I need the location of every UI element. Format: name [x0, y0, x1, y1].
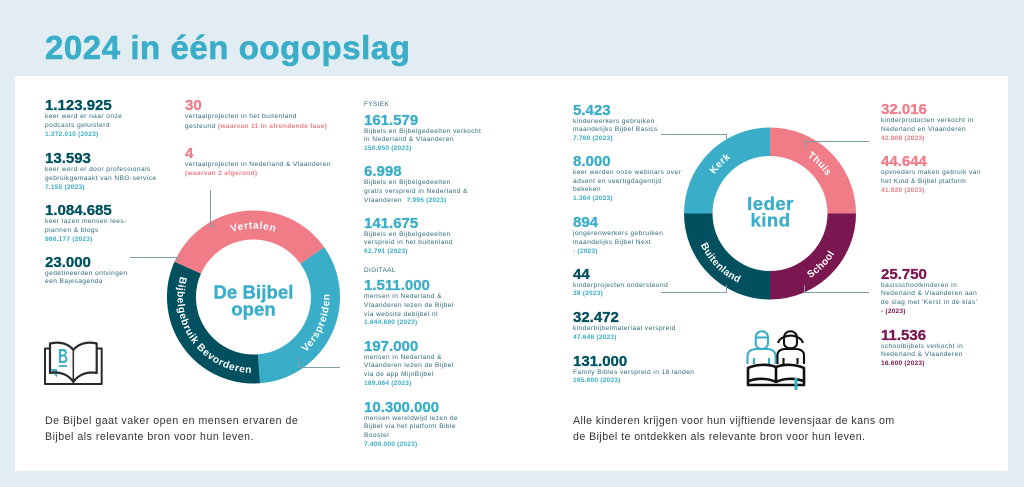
chart: Ieder kind donut: School: [807, 250, 834, 278]
text block: right mission statement: [573, 415, 895, 443]
stat column: School: 25.750: [881, 266, 927, 282]
heading: Fysiek: FYSIEK: [364, 101, 389, 108]
text block: left mission statement: De Bijbel gaat vaker open en mensen ervaren de: [45, 415, 298, 427]
chart: De Bijbel open donut: open: [231, 298, 276, 320]
stat column: Verspreiden digitaal: Vlaanderen lezen de Bijbel: [364, 362, 454, 369]
stat column: Bijbelgebruik: 960.177 (2023): [45, 236, 93, 243]
stat column: School: de slag met 'Kerst in de klas': [881, 299, 977, 306]
stat column: Buitenland: [573, 266, 694, 384]
stat column: Verspreiden digitaal: 7.400.000 (2023): [364, 441, 417, 448]
stat column: Verspreiden digitaal: via de app MijnBijbel: [364, 371, 434, 378]
stat column: Verspreiden digitaal: Booster: [364, 432, 390, 439]
stat column: Thuis: [881, 101, 981, 194]
chart: Ieder kind donut: kind: [750, 210, 791, 230]
stat column: School: 16.600 (2023): [881, 360, 925, 367]
stat column: Verspreiden digitaal: mensen in Nederland &: [364, 293, 442, 300]
heading: Digitaal: DIGITAAL: [364, 267, 396, 274]
stat column: Buitenland: 44: [573, 266, 590, 282]
chart: Ieder kind donut: Thuis: [809, 151, 830, 176]
stat column: School: Nederland & Vlaanderen aan: [881, 290, 977, 297]
stat column: Verspreiden digitaal: 1.644.690 (2023): [364, 319, 417, 326]
stat column: Vertalen: vertaalprojecten in het buitenland: [185, 113, 297, 120]
stat column: Vertalen: (waarvan 2 afgerond): [185, 170, 257, 177]
stat column: Buitenland: 47.646 (2023): [573, 334, 617, 341]
stat column: Bijbelgebruik: 1.123.925: [45, 97, 112, 114]
stat column: Verspreiden digitaal: 197.000: [364, 338, 418, 354]
stat column: Thuis: opvoeders maken gebruik van: [881, 169, 981, 176]
stat column: Verspreiden digitaal: 1.511.000: [364, 277, 430, 294]
stat column: Verspreiden fysiek: in Nederland & Vlaanderen: [364, 136, 454, 143]
stat column: Bijbelgebruik: plannen & blogs: [45, 227, 99, 234]
stat column: Bijbelgebruik: [45, 97, 156, 285]
stat column: School: Nederland & Vlaanderen: [881, 351, 963, 358]
stat column: Kerk: advent en veertigdagentijd: [573, 178, 662, 185]
stat column: Verspreiden digitaal: mensen wereldwijd lezen de: [364, 414, 458, 422]
stat column: Thuis: 44.644: [881, 153, 927, 170]
stat column: Verspreiden fysiek: 6.998: [364, 163, 402, 180]
stat column: Verspreiden fysiek: Bijbels en Bijbelgedeelten: [364, 179, 451, 186]
stat column: Buitenland: 32.472: [573, 309, 619, 326]
stat column: Verspreiden fysiek: 141.675: [364, 214, 418, 232]
stat column: Kerk: jongerenwerkers gebruiken: [573, 230, 663, 237]
stat column: Verspreiden fysiek: gratis verspreid in Nederland &: [364, 188, 468, 195]
stat column: Thuis: Nederland en Vlaanderen: [881, 126, 966, 133]
text block: right mission statement: de Bijbel te ontdekken als relevante bron voor hun leven.: [573, 431, 865, 443]
stat column: Verspreiden fysiek: [364, 112, 481, 255]
stat column: Verspreiden digitaal: via website debijbel.nl: [364, 311, 438, 318]
stat column: Bijbelgebruik: 23.000: [45, 254, 91, 270]
stat column: Vertalen: [185, 97, 331, 177]
stat column: Verspreiden digitaal: Bijbel via het platform Bible: [364, 423, 456, 430]
stat column: Verspreiden fysiek: Bijbels en Bijbelgedeelten verkocht: [364, 128, 481, 134]
stat column: School: [881, 266, 977, 367]
stat column: Verspreiden digitaal: 10.300.000: [364, 398, 439, 416]
stat column: Verspreiden digitaal: [364, 277, 458, 448]
chart: De Bijbel open donut: De Bijbel: [213, 282, 294, 302]
stat column: Bijbelgebruik: gedetineerden ontvingen: [45, 270, 127, 276]
stat column: Thuis: 42.808 (2023): [881, 135, 925, 142]
stat column: Buitenland: 165.000 (2023): [573, 377, 621, 384]
stat column: Bijbelgebruik: keer lazen mensen lees-: [45, 218, 127, 225]
stat column: Buitenland: kinderprojecten ondersteund: [573, 282, 668, 288]
stat column: Kerk: 5.423: [573, 102, 611, 118]
text block: left mission statement: [45, 415, 298, 443]
stat column: Kerk: 1.364 (2023): [573, 195, 613, 202]
stat column: Buitenland: 131.000: [573, 352, 627, 370]
stat column: Bijbelgebruik: 1.372.010 (2023): [45, 131, 98, 138]
stat column: Bijbelgebruik: keer werd er door professionals: [45, 166, 151, 173]
stat column: Buitenland: kinderbijbelmateriaal verspreid: [573, 325, 676, 332]
stat column: Verspreiden fysiek: verspreid in het buitenland: [364, 239, 453, 246]
stat column: Thuis: kinderproducten verkocht in: [881, 117, 974, 124]
stat column: Verspreiden fysiek: Vlaanderen 7.995 (2023): [364, 197, 446, 204]
stat column: Verspreiden digitaal: mensen in Nederland &: [364, 354, 442, 360]
stat column: Verspreiden fysiek: Bijbels en Bijbelgedeelten: [364, 230, 451, 238]
stat column: School: basisschoolkinderen in: [881, 282, 957, 288]
stat column: Vertalen: vertaalprojecten in Nederland & Vlaanderen: [185, 161, 331, 168]
stat column: Kerk: keer werden onze webinars over: [573, 169, 681, 176]
icon: open book with B: B: [58, 346, 68, 368]
stat column: Kerk: 894: [573, 214, 598, 231]
chart: Ieder kind donut: Buitenland: [700, 242, 742, 282]
stat column: Vertalen: gesteund (waarvan 11 in afrondende fase): [185, 123, 327, 130]
stat column: Buitenland: Family Bibles verspreid in 18 landen: [573, 368, 694, 376]
chart: De Bijbel open donut: Bijbelgebruik Bevorderen: [176, 276, 251, 373]
stat column: School: schoolbijbels verkocht in: [881, 342, 963, 350]
stat column: Thuis: het Kind & Bijbel platform: [881, 178, 966, 185]
stat column: Kerk: 8.000: [573, 153, 611, 170]
stat column: Kerk: kinderwerkers gebruiken: [573, 118, 655, 124]
text block: right mission statement: Alle kinderen krijgen voor hun vijftiende levensjaar de kans om: [573, 415, 895, 427]
stat column: Kerk: - (2023): [573, 248, 598, 255]
stat column: Kerk: maandelijks Bijbel Next: [573, 239, 651, 246]
stat column: School: - (2023): [881, 308, 906, 315]
stat column: Verspreiden fysiek: 161.579: [364, 112, 418, 128]
chart: Ieder kind donut: Kerk: [709, 154, 731, 174]
stat column: Vertalen: 4: [185, 145, 193, 162]
stat column: Kerk: [572, 102, 681, 255]
text block: left mission statement: Bijbel als relevante bron voor hun leven.: [45, 431, 254, 443]
stat column: Bijbelgebruik: 1.084.685: [45, 202, 112, 219]
stat column: Bijbelgebruik: 7.155 (2023): [45, 184, 85, 191]
stat column: Kerk: bekeken: [573, 186, 601, 193]
stat column: Bijbelgebruik: podcasts geluisterd: [45, 122, 110, 129]
chart: Ieder kind donut: Ieder: [747, 193, 794, 214]
stat column: Verspreiden digitaal: 189.064 (2023): [364, 380, 412, 387]
stat column: Vertalen: 30: [185, 97, 202, 114]
stat column: Kerk: maandelijks Bijbel Basics: [573, 126, 658, 133]
stat column: Bijbelgebruik: gebruikgemaakt van NBG-service: [45, 175, 156, 182]
stat column: Thuis: 41.920 (2023): [881, 187, 925, 194]
panel: white content card: [15, 76, 1008, 471]
chart: De Bijbel open donut: Vertalen: [230, 222, 276, 232]
stat column: Verspreiden fysiek: 62.791 (2023): [364, 248, 408, 255]
stat column: Kerk: 7.760 (2023): [573, 135, 613, 142]
title: 2024 in één oogopslag: [45, 28, 410, 66]
stat column: Buitenland: 38 (2023): [573, 290, 603, 297]
text: een Bajesagenda: [45, 278, 103, 285]
stat column: Bijbelgebruik: keer werd er naar onze: [45, 113, 122, 120]
stat column: Bijbelgebruik: 13.593: [45, 150, 91, 167]
stat column: School: 11.536: [881, 326, 926, 344]
chart: De Bijbel open donut: Verspreiden: [300, 294, 330, 350]
stat column: Verspreiden fysiek: 150.950 (2023): [364, 145, 412, 152]
stat column: Verspreiden digitaal: Vlaanderen lezen de Bijbel: [364, 302, 454, 309]
stat column: Thuis: 32.016: [881, 101, 927, 118]
